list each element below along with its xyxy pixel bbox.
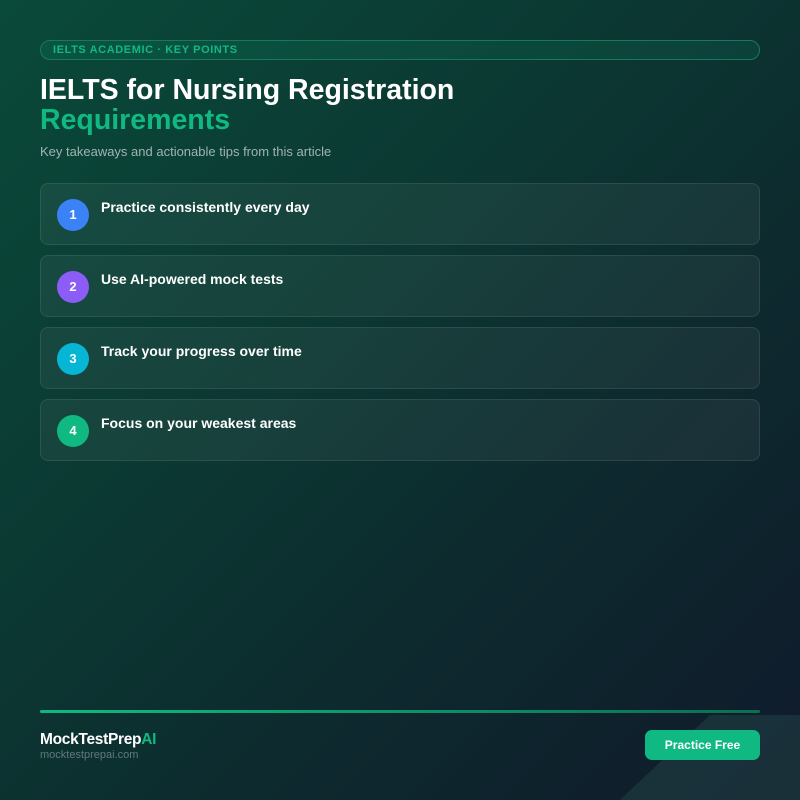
card text 4: Focus on your weakest areas (101, 415, 296, 431)
tag: category (40, 40, 760, 60)
button: Practice Free (665, 738, 740, 752)
icon: number 2 (57, 271, 89, 303)
icon: number 1: 1 (69, 207, 77, 222)
icon: number 4: 4 (69, 423, 77, 438)
icon: number 1 (57, 199, 89, 231)
icon: number 3 (57, 343, 89, 375)
title: Requirements (40, 104, 230, 136)
tag: category: IELTS ACADEMIC · KEY POINTS (53, 44, 238, 56)
button (645, 730, 760, 760)
card 3 (40, 327, 760, 389)
card text 1: Practice consistently every day (101, 199, 310, 215)
icon: number 2: 2 (69, 279, 77, 294)
card text 2: Use AI-powered mock tests (101, 271, 283, 287)
card 2 (40, 255, 760, 317)
icon: number 4 (57, 415, 89, 447)
subtitle: Key takeaways and actionable tips from this article (40, 144, 331, 159)
title (40, 74, 454, 136)
brand: MockTestPrepAI (40, 731, 156, 748)
card 4 (40, 399, 760, 461)
card 1 (40, 183, 760, 245)
title: IELTS for Nursing Registration (40, 74, 454, 106)
card text 3: Track your progress over time (101, 343, 302, 359)
url: mocktestprepai.com (40, 749, 138, 761)
icon: number 3: 3 (69, 351, 77, 366)
